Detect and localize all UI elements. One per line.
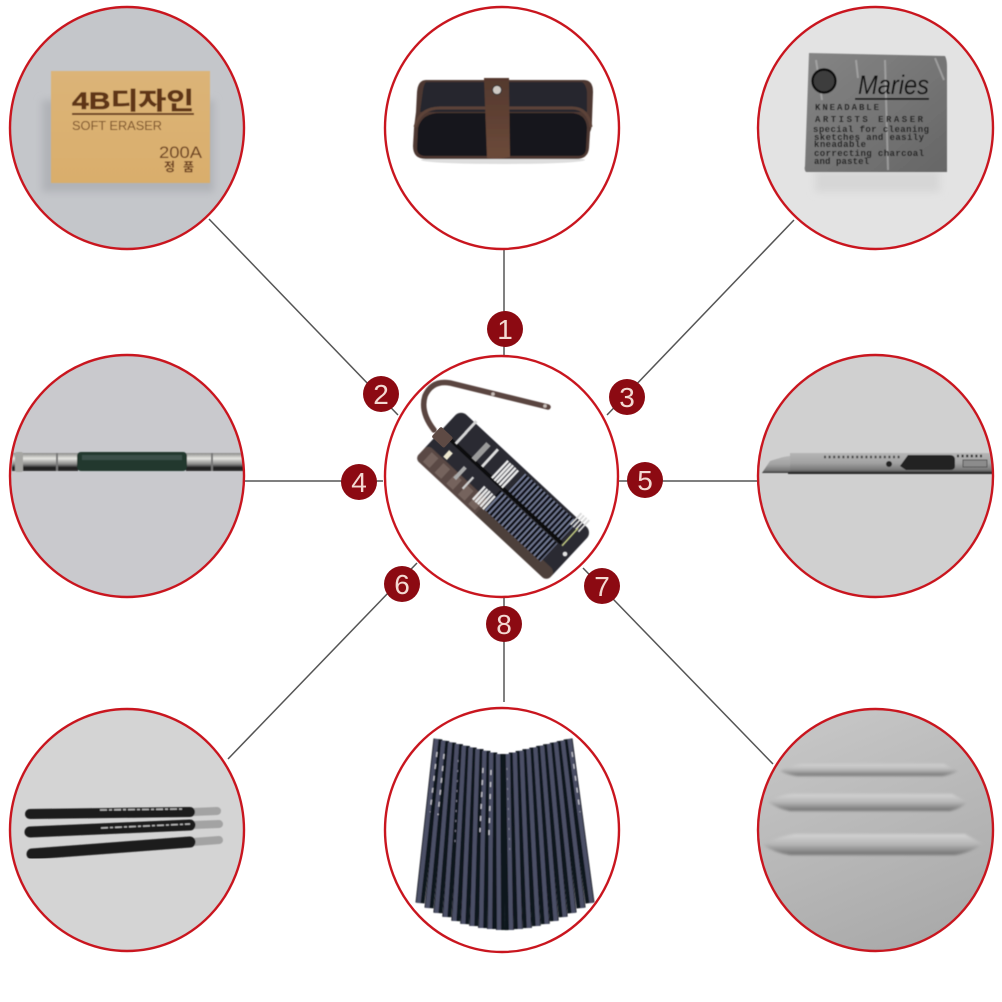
panel: graphite pencils bbox=[385, 708, 619, 952]
badge 1 bbox=[487, 311, 523, 347]
badge 8: 8 bbox=[496, 609, 512, 640]
eraser fine print bbox=[813, 103, 929, 167]
panel: charcoal pencils bbox=[10, 709, 244, 951]
eraser label: Korean small print: 정품 bbox=[164, 160, 194, 174]
eraser fine print: correcting charcoal bbox=[814, 149, 925, 159]
badge 7: 7 bbox=[594, 571, 610, 602]
roll buckle bbox=[431, 426, 453, 448]
badge 3: 3 bbox=[619, 382, 635, 413]
brand name: Maries bbox=[858, 70, 929, 100]
panel: utility knife bbox=[758, 355, 995, 597]
badge 5 bbox=[627, 462, 663, 498]
badge 4 bbox=[341, 464, 377, 500]
badge 2 bbox=[363, 376, 399, 412]
panel: blending stumps bbox=[758, 709, 993, 951]
panel: centre open pencil roll bbox=[385, 356, 618, 597]
badge 7 bbox=[584, 568, 620, 604]
connector lines bbox=[209, 219, 794, 764]
badge 5: 5 bbox=[637, 465, 653, 496]
logo circle bbox=[812, 70, 836, 92]
eraser fine print: and pastel bbox=[814, 157, 870, 167]
badge 1: 1 bbox=[497, 314, 513, 345]
roll strap bbox=[424, 383, 548, 430]
badge 8 bbox=[486, 606, 522, 642]
badge 6: 6 bbox=[394, 569, 410, 600]
badge 4: 4 bbox=[351, 467, 367, 498]
eraser fine print: KNEADABLE bbox=[815, 103, 880, 113]
roll tools and small items bbox=[445, 421, 589, 556]
eraser label: 4B: 4B디자인 bbox=[72, 88, 194, 115]
eraser label: 200A: 200A bbox=[159, 143, 203, 162]
panel: pencil extender bbox=[10, 355, 244, 597]
panel: kneadable eraser bbox=[758, 7, 993, 249]
eraser fine print: ARTISTS ERASER bbox=[815, 115, 924, 125]
roll body bbox=[415, 409, 592, 581]
eraser fine print: kneadable bbox=[814, 140, 866, 150]
eraser label: soft eraser: SOFT ERASER bbox=[72, 119, 162, 133]
badge 2: 2 bbox=[373, 379, 389, 410]
badge 3 bbox=[609, 379, 645, 415]
badge 6 bbox=[384, 566, 420, 602]
eraser fine print: special for cleaning bbox=[813, 125, 929, 135]
panel: soft eraser bbox=[10, 7, 244, 249]
eraser fine print: sketches and easily bbox=[814, 133, 925, 143]
panel: rolled pouch bbox=[385, 7, 619, 249]
